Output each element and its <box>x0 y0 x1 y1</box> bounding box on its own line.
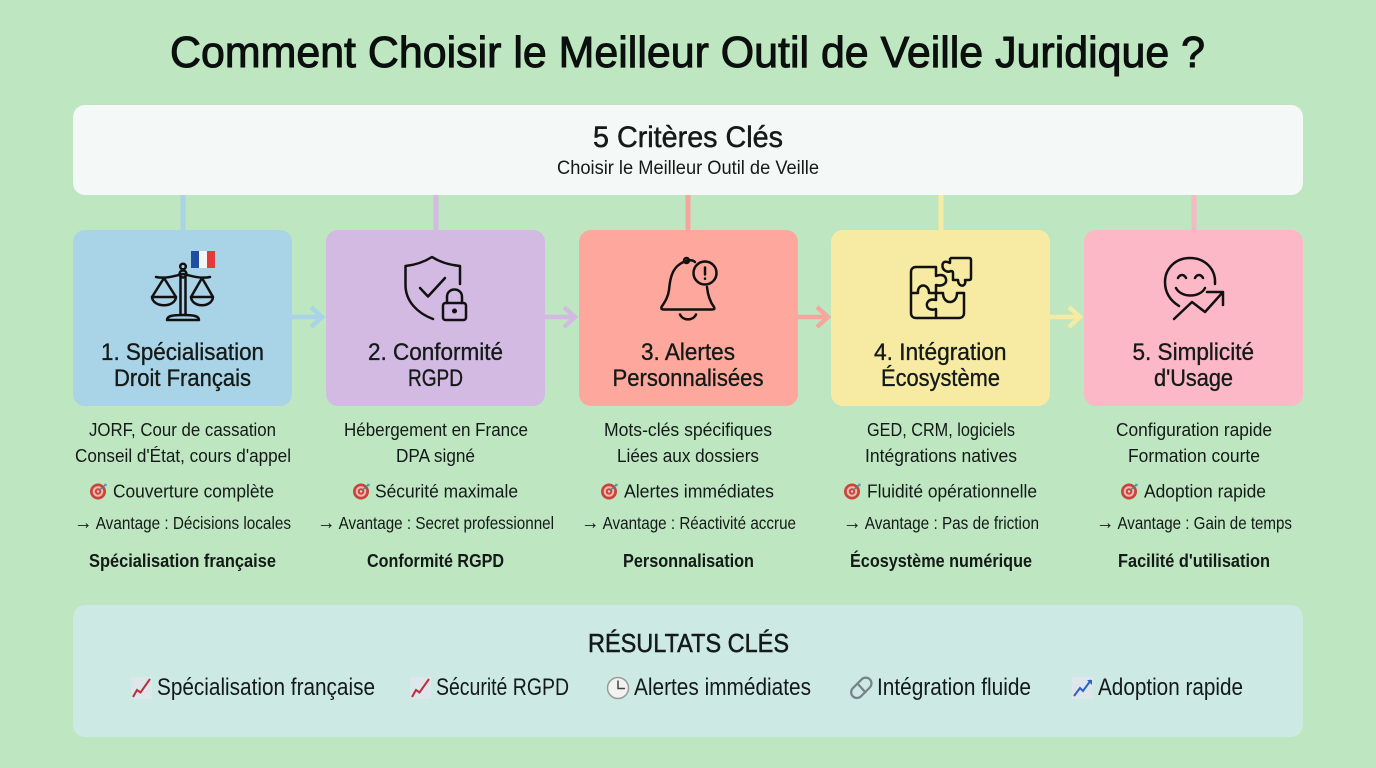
résultat 2: Sécurité RGPD <box>436 674 569 701</box>
text block: critère 3: Personnalisation <box>623 550 754 571</box>
panel: critère 3: Personnalisées <box>612 365 764 392</box>
text block: critère 5: Facilité d'utilisation <box>1118 550 1270 571</box>
arrow 1 <box>292 307 322 327</box>
panel: critère 1 <box>73 230 292 406</box>
arrow 2 <box>545 307 575 327</box>
card title: 1. Spécialisation <box>101 339 264 366</box>
panel: critère 4 <box>831 230 1050 406</box>
text block: critère 1 <box>74 419 291 571</box>
arrow 4 <box>1050 307 1080 327</box>
résultat 4: Intégration fluide <box>877 674 1031 701</box>
heading: 5 critères clés: 5 Critères Clés <box>593 121 783 154</box>
text block: critère 1: → Avantage : Décisions locales <box>74 511 291 534</box>
text block: critère 5: Adoption rapide <box>1144 480 1266 502</box>
card title: 3. Alertes <box>641 339 735 366</box>
connector lines from header to cards <box>180 194 1196 231</box>
text block: critère 4 <box>843 419 1039 571</box>
text block: critère 2: DPA signé <box>396 445 475 466</box>
text block: critère 1: JORF, Cour de cassation <box>89 419 276 440</box>
text block: critère 4: Écosystème numérique <box>850 550 1032 571</box>
subheading: Choisir le Meilleur Outil de Veille <box>557 158 819 179</box>
text block: critère 5 <box>1096 419 1292 571</box>
résultat 3: Alertes immédiates <box>634 674 811 701</box>
text block: critère 3 <box>581 419 796 571</box>
arrow 3 <box>798 307 828 327</box>
text block: critère 2 <box>317 419 554 571</box>
panel: critère 5: d'Usage <box>1154 365 1233 392</box>
text block: critère 2: Sécurité maximale <box>375 480 518 502</box>
text block: critère 5: Formation courte <box>1128 445 1260 466</box>
panel: critère 3 <box>579 230 798 406</box>
panel: critère 4: Écosystème <box>881 365 1000 392</box>
text block: critère 4: GED, CRM, logiciels <box>867 419 1015 440</box>
text block: critère 2: → Avantage : Secret professionnel <box>317 511 554 534</box>
icon: scales with French flag <box>152 251 215 320</box>
icon: puzzle <box>911 258 971 318</box>
text block: critère 4: → Avantage : Pas de friction <box>843 511 1039 534</box>
text block: critère 3: Alertes immédiates <box>624 480 774 502</box>
panel: résultats clés <box>73 605 1303 737</box>
text block: critère 5: → Avantage : Gain de temps <box>1096 511 1292 534</box>
panel: critère 2 <box>326 230 545 406</box>
heading: résultats clés: RÉSULTATS CLÉS <box>588 628 789 658</box>
icon: shield with lock <box>406 257 466 320</box>
panel: header <box>73 105 1303 195</box>
text block: critère 1: Spécialisation française <box>89 550 276 571</box>
text block: critère 3: → Avantage : Réactivité accrue <box>581 511 796 534</box>
panel: critère 5 <box>1084 230 1303 406</box>
panel: critère 2: RGPD <box>408 365 463 392</box>
text block: critère 1: Couverture complète <box>113 480 274 502</box>
icon: bell with alert <box>661 258 716 319</box>
résultat 5: Adoption rapide <box>1098 674 1243 701</box>
text block: critère 3: Mots-clés spécifiques <box>604 419 772 440</box>
panel: critère 1: Droit Français <box>114 365 251 392</box>
icon: smiley with growth arrow <box>1165 258 1223 319</box>
text block: critère 4: Fluidité opérationnelle <box>867 480 1037 502</box>
text block: critère 2: Hébergement en France <box>344 419 528 440</box>
text block: critère 2: Conformité RGPD <box>367 550 504 571</box>
text block: critère 5: Configuration rapide <box>1116 419 1272 440</box>
résultat 2 <box>410 674 569 701</box>
title: Comment Choisir le Meilleur Outil de Veille Juridique ? <box>170 28 1205 77</box>
text block: critère 4: Intégrations natives <box>865 445 1017 466</box>
résultat 1: Spécialisation française <box>157 674 375 701</box>
card title: 4. Intégration <box>874 339 1006 366</box>
text block: critère 3: Liées aux dossiers <box>617 445 759 466</box>
card title: 2. Conformité <box>368 339 503 366</box>
card title: 5. Simplicité <box>1132 339 1254 366</box>
text block: critère 1: Conseil d'État, cours d'appel <box>75 445 291 466</box>
